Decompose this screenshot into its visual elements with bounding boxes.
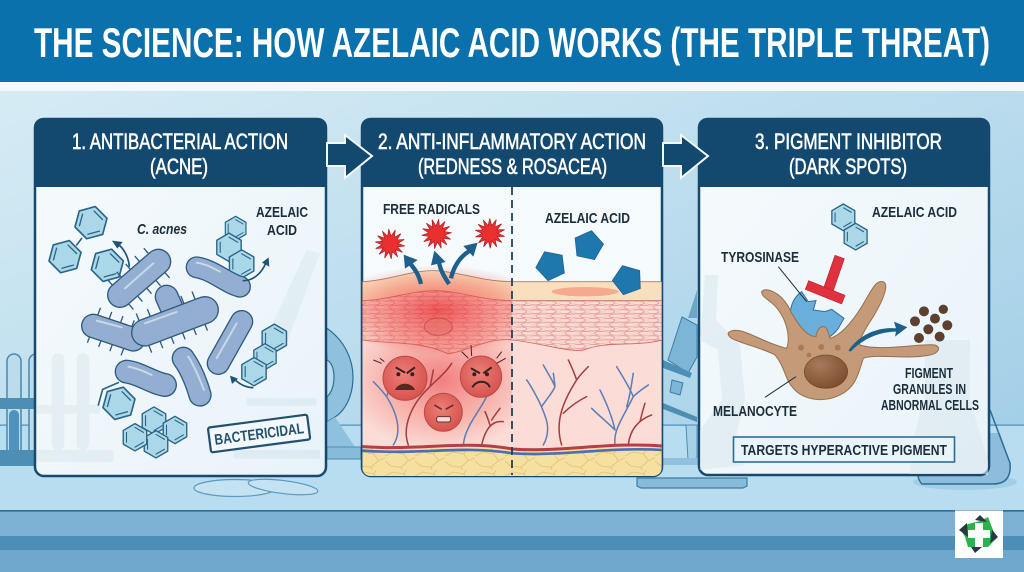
rod bacteria with pili xyxy=(93,262,242,395)
panel header xyxy=(34,118,327,187)
arrowheads xyxy=(112,241,269,384)
label: azelaic acid: AZELAIC ACID xyxy=(872,204,957,221)
arrow to granules xyxy=(848,322,907,352)
label: azelaic acid xyxy=(256,204,308,239)
faint background objects xyxy=(37,250,320,462)
panel header: (REDNESS & ROSACEA) xyxy=(418,154,607,179)
melanocyte cell xyxy=(728,282,939,400)
panel header: (DARK SPOTS) xyxy=(789,154,907,179)
main vessels xyxy=(362,445,662,454)
panel: anti-inflammatory action xyxy=(328,118,663,477)
test tubes and rack xyxy=(0,354,43,466)
free radicals starbursts xyxy=(373,216,508,261)
panel header: 1. ANTIBACTERIAL ACTION xyxy=(72,129,288,154)
stamp: bactericidal xyxy=(208,415,310,452)
arrow: step 1 to step 2 xyxy=(327,135,372,178)
molecule: cluster xyxy=(123,407,187,458)
label: pigment granules: FIGMENT xyxy=(905,365,953,382)
label: pigment granules: ABNORMAL CELLS xyxy=(881,397,979,414)
faint flask and microscope behind panel xyxy=(700,275,988,474)
illustration: bacteria and azelaic acid molecules xyxy=(47,203,286,458)
label: melanocyte: MELANOCYTE xyxy=(713,403,797,420)
logo xyxy=(955,510,1003,558)
title band xyxy=(0,0,1024,91)
fat layer xyxy=(362,448,662,477)
molecule: right xyxy=(242,324,286,386)
angry inflammatory cells xyxy=(373,345,506,431)
leader lines xyxy=(765,267,807,397)
panel header xyxy=(698,118,990,187)
label: pigment granules: GRANULES IN xyxy=(893,381,966,398)
blood vessels right xyxy=(527,360,652,445)
flask xyxy=(913,410,1017,490)
microscope right and base xyxy=(637,290,747,488)
melanosome dots in cell xyxy=(798,344,841,357)
pigment granules xyxy=(910,305,952,343)
microscope left xyxy=(325,327,361,459)
lab desk xyxy=(0,424,1024,572)
callout: targets hyperactive pigment xyxy=(734,437,954,462)
arrows rising from skin xyxy=(404,243,478,284)
stamp: bactericidal: BACTERICIDAL xyxy=(213,420,305,449)
panel header xyxy=(361,118,663,187)
label: tyrosinase: TYROSINASE xyxy=(721,249,799,266)
red inhibitor symbol xyxy=(805,255,845,304)
azelaic acid pentagons xyxy=(531,228,646,297)
blood vessels left xyxy=(373,363,503,445)
tyrosinase enzyme xyxy=(790,292,844,342)
panel: antibacterial action xyxy=(34,118,327,476)
arrows xyxy=(117,244,266,388)
molecule: lower left xyxy=(98,383,137,423)
left inflammation glow xyxy=(362,267,512,444)
label: pigment granules xyxy=(881,365,979,414)
cell nucleus xyxy=(804,355,848,388)
label: azelaic acid: AZELAIC ACID xyxy=(545,210,630,227)
divider xyxy=(511,187,513,475)
background wall xyxy=(0,0,1024,430)
arrow: step 2 to step 3 xyxy=(663,135,708,178)
dermis xyxy=(362,337,662,450)
label: azelaic acid: ACID xyxy=(267,222,297,239)
panel header: 2. ANTI-INFLAMMATORY ACTION xyxy=(378,129,646,154)
panel header: (ACNE) xyxy=(150,154,208,179)
panel: pigment inhibitor xyxy=(698,118,990,475)
azelaic acid molecule xyxy=(832,204,867,250)
skin cross-section illustration xyxy=(362,267,662,476)
molecule: upper right xyxy=(217,216,254,278)
epidermis left and right xyxy=(362,291,662,354)
molecule: upper left xyxy=(47,203,125,285)
label: free radicals: FREE RADICALS xyxy=(383,201,480,218)
illustration: melanocyte and tyrosinase xyxy=(728,204,952,400)
petri dishes xyxy=(194,476,319,498)
panel header: 3. PIGMENT INHIBITOR xyxy=(755,129,942,154)
callout: targets hyperactive pigment: TARGETS HYPERACTIVE PIGMENT xyxy=(741,442,947,459)
label: azelaic acid: AZELAIC xyxy=(256,204,308,221)
stratum corneum xyxy=(362,271,662,303)
label: C. acnes: C. acnes xyxy=(137,221,187,238)
right mild patch xyxy=(552,287,618,296)
